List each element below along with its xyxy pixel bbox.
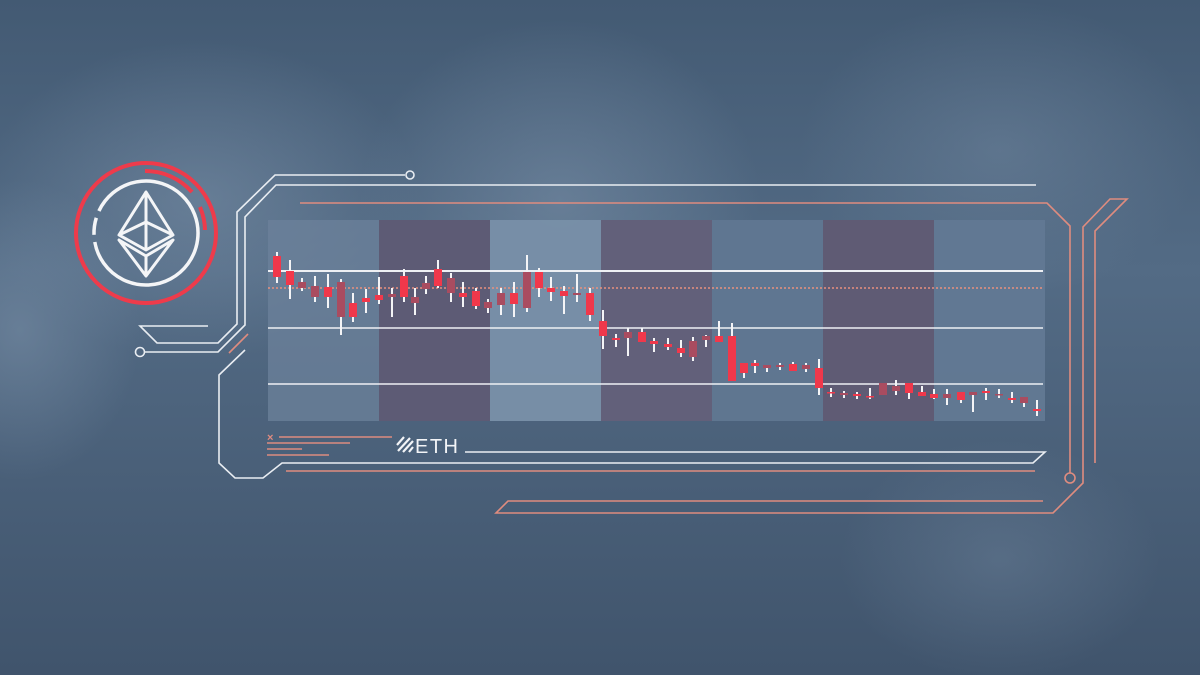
circuit frame: salmon lines	[229, 199, 1127, 513]
icon: ethereum logo	[76, 163, 216, 303]
legend	[267, 432, 392, 455]
circuit frame: white lines	[136, 171, 1045, 478]
chart panel	[268, 220, 1045, 421]
legend: ×	[267, 432, 273, 444]
label: ETH: ETH	[415, 436, 458, 458]
candlestick series	[277, 252, 1037, 416]
